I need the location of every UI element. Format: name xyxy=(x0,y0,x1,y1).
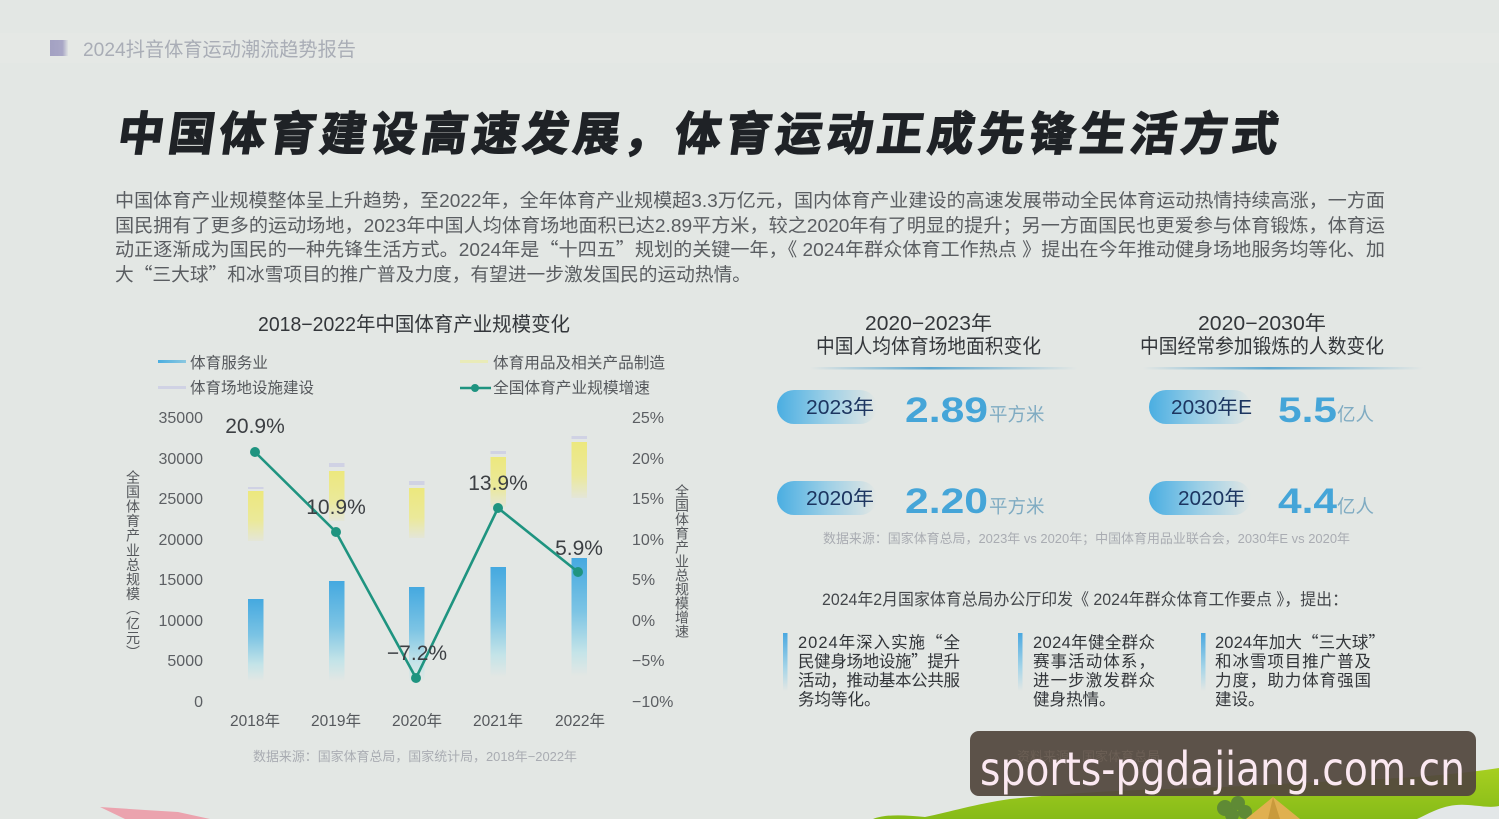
bars: 2018 xyxy=(248,487,264,681)
growth line xyxy=(250,447,583,683)
icon: header square xyxy=(50,40,68,56)
right axis labels: 25% xyxy=(632,410,664,427)
intro paragraph: 动正逐渐成为国民的一种先锋生活方式。2024年是 “十四五”规划的关键一年，《 2024年群众体育工作热点 》提出在今年推动健身场地服务均等化、加 xyxy=(115,235,1385,262)
header band xyxy=(0,33,1499,63)
report name: 2024抖音体育运动潮流趋势报告 xyxy=(83,39,356,61)
decoration: pink shape xyxy=(100,807,210,819)
policy point 1: 务均等化。 xyxy=(798,690,880,709)
legend xyxy=(158,354,665,397)
stat: 2020 xyxy=(1149,481,1374,521)
legend: 全国体育产业规模增速 xyxy=(493,379,650,397)
growth data labels: −7.2% xyxy=(387,642,447,665)
policy point 1 xyxy=(783,629,960,709)
panel heading: 2020−2023年 xyxy=(865,312,992,335)
right axis labels: 5% xyxy=(632,572,655,589)
right axis labels: −5% xyxy=(632,653,664,670)
stat: 2023: 2.89 xyxy=(905,391,988,430)
policy point 1: 2024年深入实施“全 xyxy=(798,629,960,653)
chart title: 2018−2022年中国体育产业规模变化 xyxy=(258,313,570,336)
stat: 2020: 4.4 xyxy=(1278,482,1338,521)
stat: 2020: 亿人 xyxy=(1337,496,1374,517)
intro paragraph xyxy=(115,190,1385,287)
left axis title: 全国体育产业总规模（亿元） xyxy=(123,469,143,660)
legend: 体育服务业 xyxy=(190,354,268,372)
stat: 2023: 平方米 xyxy=(989,404,1045,425)
right axis labels: −10% xyxy=(632,694,673,711)
left axis labels: 10000 xyxy=(158,613,203,630)
stat: 2020: 平方米 xyxy=(989,496,1045,517)
x axis labels: 2018年 xyxy=(230,712,280,730)
x axis labels: 2020年 xyxy=(392,712,442,730)
policy point 3 xyxy=(1201,629,1385,709)
stat: 2030E xyxy=(1149,390,1374,430)
growth data labels xyxy=(225,415,603,665)
growth data labels: 5.9% xyxy=(555,537,603,560)
panel: per-capita sports area xyxy=(777,312,1077,521)
policy point 2: 2024年健全群众 xyxy=(1033,633,1155,652)
growth data labels: 13.9% xyxy=(468,472,528,495)
right axis labels: 0% xyxy=(632,613,655,630)
watermark: 资料来源：国家体育总局 xyxy=(1017,749,1160,764)
right axis labels: 20% xyxy=(632,451,664,468)
intro paragraph: 国民拥有了更多的运动场地，2023年中国人均体育场地面积已达2.89平方米，较之2020年有了明显的提升；另一方面国民也更爱参与体育锻炼，体育运 xyxy=(115,215,1385,236)
x axis labels xyxy=(230,712,605,730)
intro paragraph: 大“三大球”和冰雪项目的推广普及力度，有望进一步激发国民的运动热情。 xyxy=(115,260,751,287)
policy point 2 xyxy=(1018,633,1155,709)
panel heading: 2020−2030年 xyxy=(1198,312,1326,335)
stat: 2023 xyxy=(777,390,1045,430)
stat: 2020 xyxy=(777,481,1045,521)
panel heading: 中国经常参加锻炼的人数变化 xyxy=(1140,335,1384,358)
left axis labels: 25000 xyxy=(158,491,203,508)
left axis labels: 35000 xyxy=(158,410,203,427)
decoration: green hill landscape xyxy=(873,768,1499,819)
stat: 2020: 2.20 xyxy=(905,482,988,521)
stat: 2020: 2020年 xyxy=(1178,487,1245,510)
x axis labels: 2022年 xyxy=(555,712,605,730)
title: 中国体育建设高速发展，体育运动正成先锋生活方式 xyxy=(114,97,1283,164)
stat: 2020: 2020年 xyxy=(806,487,874,510)
bars: 2021 xyxy=(490,451,506,677)
right axis title: 全国体育产业总规模增速 xyxy=(672,483,692,639)
left axis labels: 15000 xyxy=(158,572,203,589)
stats source: 数据来源：国家体育总局，2023年 vs 2020年；中国体育用品业联合会，2030年E vs 2020年 xyxy=(823,531,1350,547)
policy point 3: 力度，助力体育强国 xyxy=(1215,671,1371,690)
stat: 2030E: 亿人 xyxy=(1337,404,1374,425)
policy point 2: 赛事活动体系， xyxy=(1033,651,1155,671)
panel heading xyxy=(816,312,1041,358)
left axis labels: 5000 xyxy=(167,653,203,670)
left axis labels xyxy=(158,410,203,711)
policy point 1: 民健身场地设施”提升 xyxy=(798,648,960,672)
bars: 2020 xyxy=(409,481,424,681)
stat: 2030E: 2030年E xyxy=(1171,396,1252,419)
growth data labels: 10.9% xyxy=(306,496,366,519)
policy point 2: 进一步激发群众 xyxy=(1033,671,1155,690)
panel: exercising population xyxy=(1140,312,1423,521)
x axis labels: 2019年 xyxy=(311,712,361,730)
policy point 2: 健身热情。 xyxy=(1033,690,1116,709)
bars: 2019 xyxy=(329,463,344,681)
legend: 体育场地设施建设 xyxy=(190,379,314,397)
panel: industry scale chart xyxy=(123,313,692,764)
panel heading: 中国人均体育场地面积变化 xyxy=(816,335,1041,358)
right axis labels: 15% xyxy=(632,491,664,508)
x axis labels: 2021年 xyxy=(473,712,523,730)
chart source: 数据来源：国家体育总局，国家统计局，2018年−2022年 xyxy=(253,749,577,764)
policy point 1: 活动，推动基本公共服 xyxy=(798,671,960,690)
left axis labels: 0 xyxy=(194,694,203,711)
left axis labels: 20000 xyxy=(158,532,203,549)
policy intro: 2024年2月国家体育总局办公厅印发《 2024年群众体育工作要点 》，提出： xyxy=(822,590,1348,609)
stat: 2023: 2023年 xyxy=(806,396,874,419)
bars: 2022 xyxy=(572,436,587,676)
growth data labels: 20.9% xyxy=(225,415,285,438)
panel heading xyxy=(1140,312,1384,358)
policy point 3: 2024年加大“三大球” xyxy=(1215,629,1385,653)
left axis labels: 30000 xyxy=(158,451,203,468)
intro paragraph: 中国体育产业规模整体呈上升趋势，至2022年，全年体育产业规模超3.3万亿元，国内体育产业建设的高速发展带动全民体育运动热情持续高涨，一方面 xyxy=(115,190,1385,211)
legend: 体育用品及相关产品制造 xyxy=(493,354,665,372)
policy point 3: 和冰雪项目推广普及 xyxy=(1215,652,1371,671)
right axis labels xyxy=(632,410,673,711)
right axis labels: 10% xyxy=(632,532,664,549)
stat: 2030E: 5.5 xyxy=(1278,391,1337,430)
policy point 3: 建设。 xyxy=(1215,690,1264,709)
